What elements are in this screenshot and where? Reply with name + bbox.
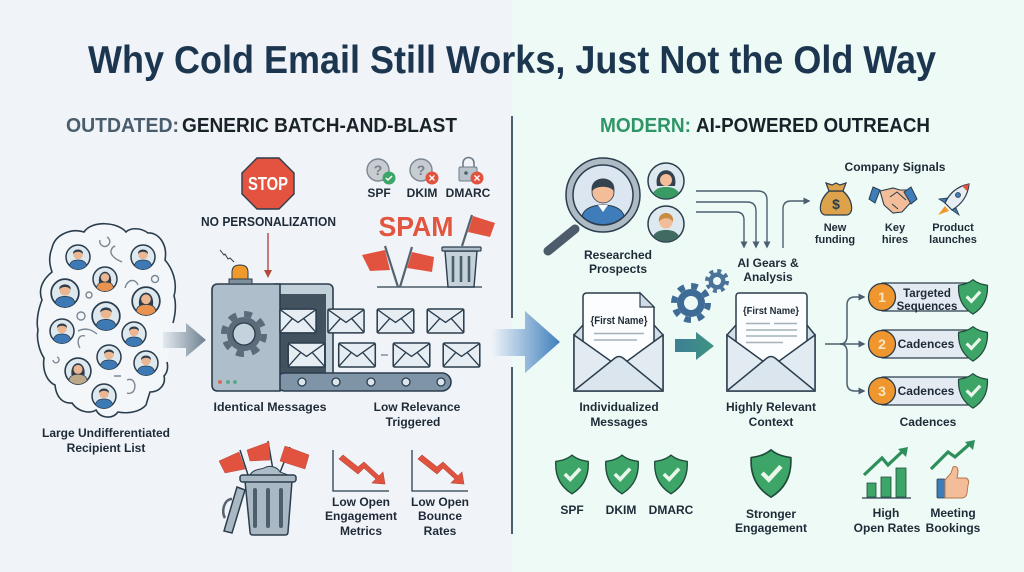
panel: recipient list (37, 224, 175, 455)
label: researched prospects: Prospects (589, 262, 647, 276)
label: highly relevant context: Highly Relevant (726, 400, 816, 414)
icon: money bag (820, 183, 852, 215)
trash flags (240, 441, 290, 475)
icon: magnifier with prospect (548, 158, 640, 251)
red flags (362, 246, 434, 287)
chart: low bounce: Low Open (411, 495, 469, 509)
sequence row 1 (868, 280, 987, 314)
background: right panel (512, 0, 1024, 572)
label: meeting bookings: Meeting (930, 506, 976, 520)
sequence row 1: Targeted (903, 288, 951, 300)
heading: modern (600, 115, 930, 137)
auth labels: DKIM (407, 186, 437, 200)
list label: Recipient List (67, 441, 145, 455)
icon: overflowing trash (219, 441, 309, 535)
label: identical messages: Identical Messages (214, 400, 327, 414)
label: high open rates: Open Rates (854, 521, 921, 535)
machine body (212, 284, 280, 391)
signal labels: hires (882, 234, 908, 246)
chart: low engagement (325, 450, 397, 538)
icon: growth chart (862, 447, 911, 498)
list doodles (53, 237, 138, 393)
icon: money bag: $ (832, 196, 840, 212)
label: researched prospects: Researched (584, 248, 652, 262)
arrow: personalized to relevant (675, 332, 714, 360)
signal labels: New (824, 222, 847, 234)
envelopes on conveyor (280, 309, 480, 367)
label: researched prospects (584, 248, 652, 276)
auth labels: SPF (367, 186, 391, 200)
label: stronger engagement (735, 507, 807, 535)
label: cadences: Cadences (900, 415, 957, 429)
chart: low bounce (411, 450, 469, 538)
signal labels: launches (929, 234, 977, 246)
icon: handshake (869, 187, 917, 213)
sequence row 3 (868, 374, 987, 408)
title: Why Cold Email Still Works, Just Not the Old Way (88, 39, 936, 82)
label: individualized messages: Individualized (579, 400, 659, 414)
conveyor (276, 373, 451, 391)
arrow: outdated to modern (492, 311, 560, 373)
icon: relevant envelope (727, 293, 815, 391)
chart: low engagement: Engagement (325, 509, 397, 523)
label: AI gears and analysis (737, 256, 799, 284)
icon: rocket (938, 184, 969, 215)
label: individualized messages: Messages (590, 415, 648, 429)
avatars (50, 245, 160, 409)
arrow: into machine (264, 233, 272, 278)
heading: outdated: OUTDATED: (66, 115, 179, 137)
chart: low engagement: Metrics (340, 524, 382, 538)
small bin (442, 215, 495, 287)
icon: gears (674, 271, 727, 320)
label: high open rates: High (873, 506, 899, 520)
arrows: prospects to AI (696, 191, 767, 247)
sequence row 3: 3 (878, 383, 886, 399)
icon: stop sign: STOP (248, 174, 288, 194)
cloud outline (37, 224, 175, 417)
label: stronger engagement: Engagement (735, 521, 807, 535)
heading: outdated: GENERIC BATCH-AND-BLAST (182, 115, 457, 137)
chart: low bounce: Bounce (418, 509, 462, 523)
icons: authentication shields: SPF (560, 503, 584, 517)
arrows: tree to sequences (825, 297, 864, 391)
signal labels: Product (932, 222, 974, 234)
sequence row 1: Sequences (897, 301, 957, 313)
label: low relevance triggered: Low Relevance (374, 400, 461, 414)
heading: modern: MODERN: (600, 115, 691, 137)
machine rear (270, 284, 333, 384)
sequence row 2 (868, 327, 987, 361)
trash body (245, 481, 292, 535)
icon: gear (224, 314, 264, 354)
label: high open rates (854, 506, 921, 535)
label: highly relevant context: Context (749, 415, 793, 429)
icons: authentication shields (556, 455, 694, 517)
dmarc lock (459, 158, 484, 184)
spam word: SPAM (378, 211, 454, 242)
label: low relevance triggered: Triggered (386, 415, 440, 429)
label: meeting bookings: Bookings (926, 521, 981, 535)
panel: machine (212, 250, 451, 391)
icons: authentication shields: DMARC (649, 503, 694, 517)
icon: individualized envelope: {First Name} (590, 315, 648, 327)
list label (42, 426, 170, 455)
signal labels: Key (885, 222, 906, 234)
trash lid (224, 487, 245, 533)
list label: Large Undifferentiated (42, 426, 170, 440)
avatars: prospects (648, 163, 684, 242)
heading: company signals: Company Signals (844, 160, 946, 174)
sequence row 3: Cadences (898, 384, 955, 398)
label: highly relevant context (726, 400, 816, 429)
arrow: list to machine (163, 323, 206, 357)
status lights (218, 380, 237, 384)
icon: stronger engagement shield (751, 450, 791, 497)
signal labels: funding (815, 234, 855, 246)
label: AI gears and analysis: AI Gears & (737, 256, 799, 270)
arrow: AI to signals (783, 201, 809, 248)
icon: relevant envelope: {First Name} (743, 305, 799, 317)
label: low relevance triggered (374, 400, 461, 429)
icons: authentication shields: DKIM (606, 503, 636, 517)
background: left panel (0, 0, 512, 572)
machine window (279, 294, 326, 374)
auth labels (367, 186, 491, 200)
signal labels (815, 222, 977, 246)
icon: beacon (220, 250, 252, 284)
sequence row 2: 2 (878, 336, 886, 352)
label: stronger engagement: Stronger (746, 507, 796, 521)
label: meeting bookings (926, 506, 981, 535)
icon: stop sign (242, 158, 294, 209)
heading: modern: AI-POWERED OUTREACH (696, 115, 930, 137)
trash pile (250, 466, 288, 475)
sequence row 2: Cadences (898, 337, 955, 351)
label: no personalization: NO PERSONALIZATION (201, 215, 336, 229)
icons: failed authentication (367, 158, 491, 200)
icon: spam flags and bin (362, 215, 495, 287)
chart: low bounce: Rates (424, 524, 457, 538)
auth labels: DMARC (446, 186, 491, 200)
sequence row 1: 1 (878, 289, 886, 305)
icon: thumbs up with arrow (931, 440, 975, 498)
spf failed: ? (374, 162, 382, 178)
dkim failed: ? (417, 162, 425, 178)
chart: low engagement: Low Open (332, 495, 390, 509)
label: individualized messages (579, 400, 659, 429)
label: AI gears and analysis: Analysis (743, 270, 793, 284)
icon: individualized envelope (574, 293, 663, 391)
heading: outdated (66, 115, 457, 137)
